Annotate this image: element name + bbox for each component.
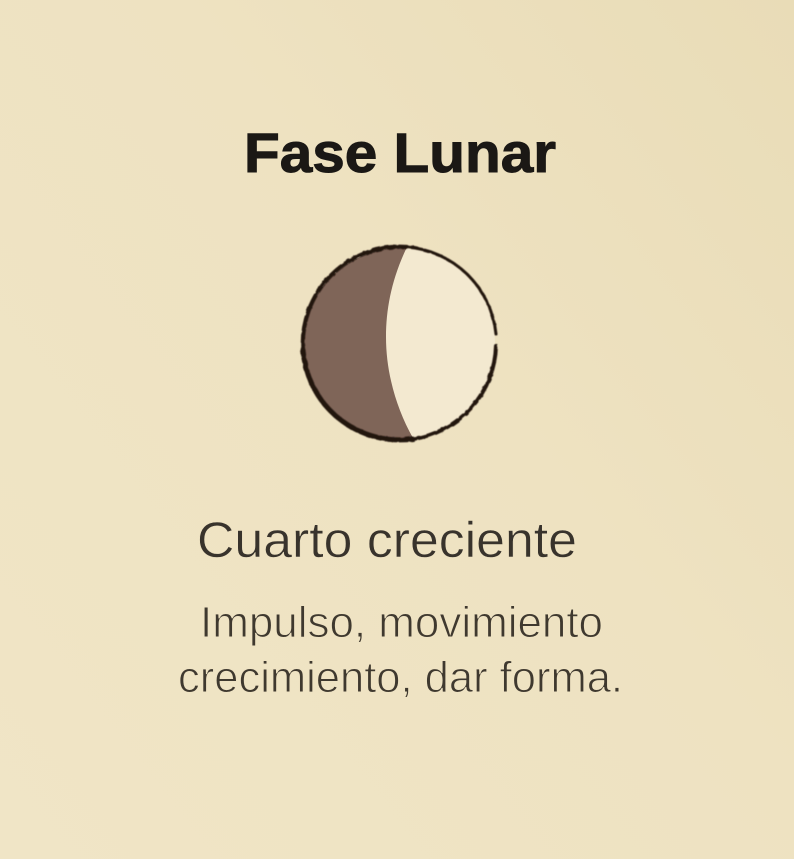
- phase name: Cuarto creciente: [197, 512, 577, 568]
- title: Fase Lunar: [244, 121, 556, 184]
- moon shaded area: [303, 247, 413, 441]
- description line 1: Impulso, movimiento: [200, 598, 603, 647]
- description: [178, 598, 623, 702]
- icon: moon phase first quarter: [303, 247, 496, 441]
- moon outline: [303, 247, 496, 440]
- moon lit disc: [303, 248, 495, 440]
- description line 2: crecimiento, dar forma.: [178, 653, 623, 702]
